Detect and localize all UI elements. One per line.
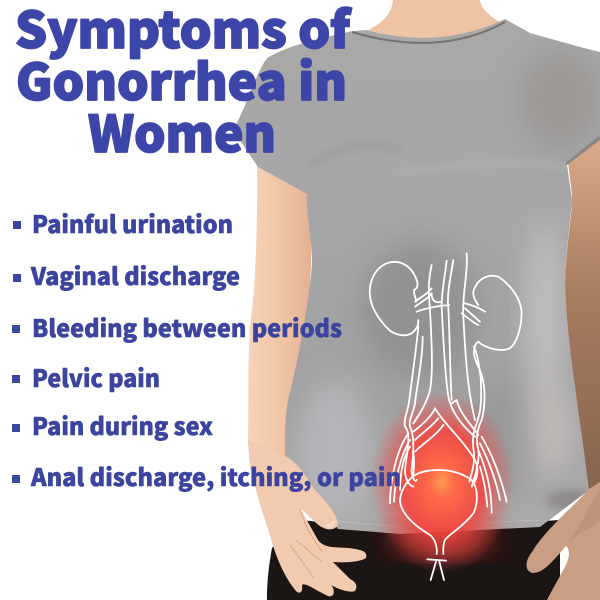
symptom list: Anal discharge, itching, or pain: [30, 458, 401, 493]
symptom list: Pelvic pain: [32, 359, 160, 394]
title: Gonorrhea in: [16, 43, 347, 115]
uterus outline: [413, 400, 478, 482]
grey t-shirt: [220, 10, 600, 540]
left arm: [248, 165, 311, 470]
dark trousers: [267, 520, 560, 600]
urethra: [427, 559, 446, 580]
urinary system line drawing: [370, 253, 522, 580]
bullet 1: [13, 221, 21, 229]
neck: [368, 0, 500, 38]
red pain glow on pelvis: [370, 390, 514, 574]
bullet 4: [12, 375, 20, 383]
bullet 6: [12, 475, 20, 483]
right hand: [526, 482, 600, 600]
sleeve hem shadow: [567, 138, 600, 165]
symptom list: Pain during sex: [32, 407, 213, 442]
symptom list: Painful urination: [32, 205, 233, 240]
symptom list: Vaginal discharge: [30, 257, 240, 292]
right hand knuckle shading: [566, 490, 600, 546]
title: [15, 0, 352, 167]
symptom list: [12, 205, 401, 493]
bullet 3: [12, 325, 20, 333]
bullet 2: [13, 274, 21, 282]
symptom list: Bleeding between periods: [32, 309, 342, 344]
right kidney: [473, 276, 522, 350]
photo: woman in grey t-shirt: [220, 0, 600, 600]
left hand with thumb and fingers: [248, 440, 366, 596]
title: Women: [88, 95, 276, 167]
shirt shading: [299, 22, 600, 527]
fan of vessels right: [478, 437, 507, 513]
fan of vessels left: [390, 433, 410, 503]
renal vessels and ureters: [405, 253, 485, 487]
bladder: [400, 470, 477, 554]
right arm: [565, 138, 600, 530]
bullet 5: [12, 424, 20, 432]
left kidney: [370, 262, 418, 335]
